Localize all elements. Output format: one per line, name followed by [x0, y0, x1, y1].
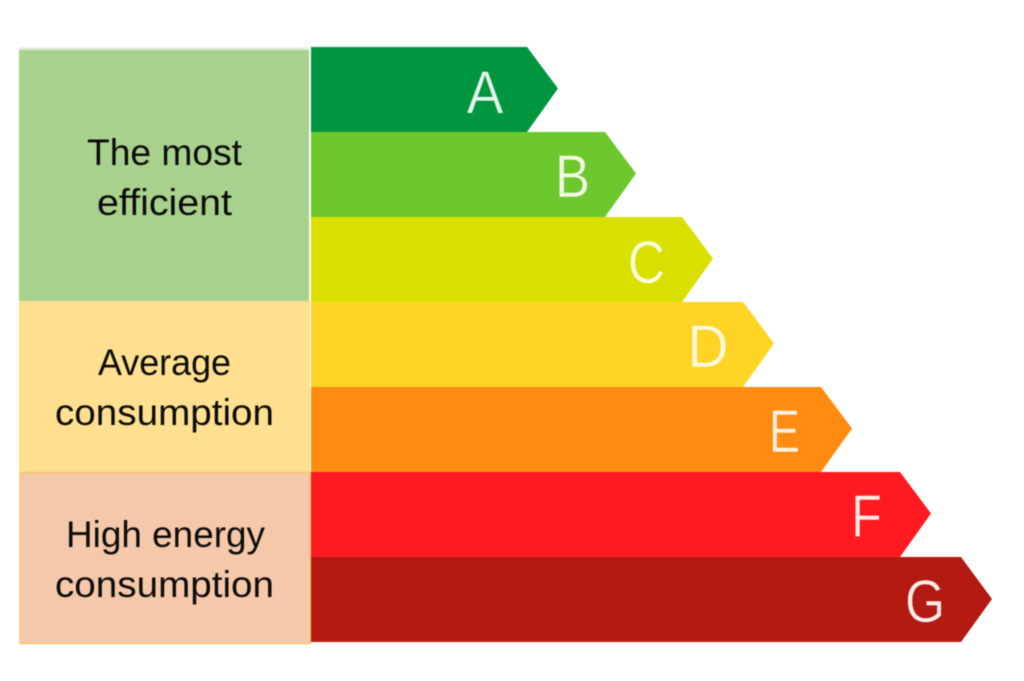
arrow: class C: C: [628, 228, 665, 296]
panel: the most efficient: efficient: [97, 182, 233, 223]
arrow: class D: [311, 302, 774, 387]
panel: average consumption: [19, 301, 310, 472]
arrow: class B: [311, 132, 636, 217]
arrow: class E: E: [769, 398, 800, 465]
arrow: class F: F: [851, 483, 882, 550]
arrow: class E: [311, 387, 852, 472]
panel: average consumption: consumption: [55, 392, 274, 433]
arrow: class G: G: [905, 567, 945, 635]
panel: high energy consumption: consumption: [55, 564, 274, 605]
arrow: class F: [311, 472, 931, 557]
panel: the most efficient: The most: [87, 132, 243, 173]
panel: the most efficient: [19, 48, 309, 301]
arrow: class A: [311, 47, 558, 132]
arrow: class C: [311, 217, 713, 302]
arrow: class D: D: [687, 314, 729, 380]
panel: high energy consumption: [20, 472, 310, 644]
panel: high energy consumption: High energy: [66, 514, 265, 555]
arrow: class B: B: [555, 143, 590, 210]
panel: average consumption: Average: [98, 342, 231, 383]
arrow: class A: A: [467, 60, 504, 127]
arrow: class G: [311, 557, 992, 642]
